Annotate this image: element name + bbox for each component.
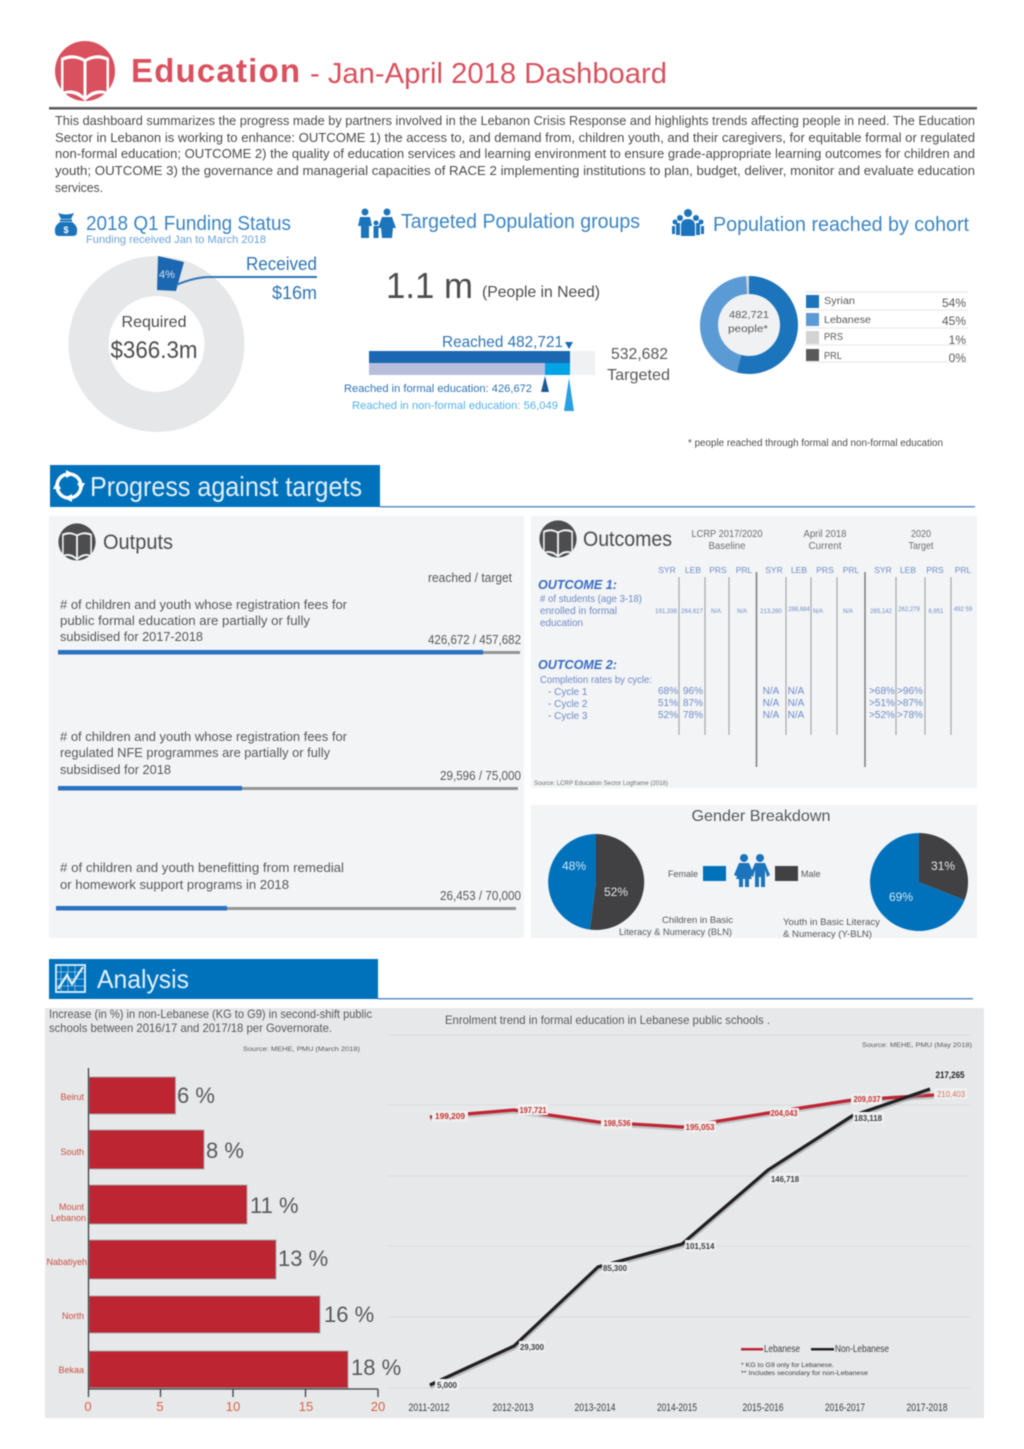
pie captions [619,915,880,940]
outcome 2: - Cycle 3 [548,711,588,722]
cohort sub-headers: PRS [926,565,944,575]
donut: funding: $366.3m [110,337,198,364]
outcome 2: >52% [869,710,895,721]
cohort sub-headers: PRL [736,565,753,575]
outcome 1: N/A [843,609,853,615]
x axis years: 2012-2013 [492,1402,534,1414]
cohort sub-headers: PRL [955,565,972,575]
pie: youth BLN [870,833,968,931]
icon: family [358,208,396,238]
title: - Jan-April 2018 Dashboard [310,58,667,90]
progress bar: reached vs targeted: Targeted [607,367,670,384]
series: Lebanese: 204,043 [770,1109,798,1118]
people in need: (People in Need) [482,284,600,301]
output 3 [56,860,521,910]
footnote: cohort: * people reached through formal and non-formal education [688,438,943,449]
donut: funding: Required [122,314,186,331]
outcome 1: 213,260 [760,609,782,615]
title: Education [131,52,300,89]
heading: funding: 2018 Q1 Funding Status [86,213,291,235]
series: Lebanese: 198,536 [604,1119,631,1128]
section header: progress against targets: Progress against targets [90,471,362,502]
x axis labels [84,1399,385,1414]
panel: analysis background [45,1008,984,1418]
x axis labels: 5 [156,1399,164,1414]
output 3: # of children and youth benefitting from remedial [60,860,344,875]
outcome 2: 52% [658,710,678,721]
series: Non-Lebanese: 217,265 [936,1070,964,1080]
heading: outputs: Outputs [103,531,173,554]
legend and notes: ** Includes secondary for non-Lebanese [741,1371,869,1377]
cohort sub-headers [658,565,972,575]
outcome 1: enrolled in formal [540,606,617,617]
legend and notes: * KG to G9 only for Lebanese. [741,1363,834,1369]
icon: couple [734,854,770,887]
donut: funding: Received [246,254,317,274]
x axis years: 2013-2014 [574,1402,616,1414]
y axis labels: South [60,1147,84,1157]
outcome 1: 265,142 [870,609,892,615]
cohort sub-headers: PRS [816,565,834,575]
outcome 2: N/A [788,710,805,721]
heading: gender: Gender Breakdown [692,808,830,825]
outcome 2: 78% [683,710,703,721]
pie: youth BLN: 31% [931,859,955,873]
pie: children BLN: 52% [604,885,628,899]
legend: cohort: PRL [824,351,842,362]
value labels: 18 % [351,1355,401,1380]
outcome 2: >87% [897,698,923,709]
icon: cycle arrows [53,470,85,502]
source: outcomes: Source: LCRP Education Sector Logframe (2018) [534,781,668,787]
x axis labels: 0 [84,1399,92,1414]
outcome 1: N/A [711,609,721,615]
column headers: 2020 [911,529,931,540]
outcome 2: >68% [869,686,895,697]
outcome 2: >78% [897,710,923,721]
bars [89,1077,348,1388]
outcome 1: education [540,618,583,629]
icon: red book [55,41,115,101]
intro paragraph: youth; OUTCOME 3) the governance and managerial capacities of RACE 2 implementing institutions to plan, budget, deliver, monitor and evaluate education [55,163,975,178]
x axis years: 2016-2017 [825,1402,865,1414]
legend: cohort: 1% [949,333,966,347]
output 2: # of children and youth whose registration fees for [60,729,348,744]
series: Lebanese: 210,403 [937,1090,966,1099]
bar chart: increase in non-Lebanese by Governorate [46,1007,401,1414]
series: Lebanese: 197,721 [520,1106,547,1115]
value labels: 13 % [278,1246,328,1271]
x axis years [408,1402,948,1414]
series: Non-Lebanese: 146,718 [771,1175,800,1184]
series: Non-Lebanese [430,1070,964,1390]
outcome 2: - Cycle 2 [548,699,588,710]
chart title: schools between 2016/17 and 2017/18 per Governorate. [49,1021,332,1035]
output 1: # of children and youth whose registration fees for [60,597,348,612]
cohort sub-headers: SYR [658,565,676,575]
series: Non-Lebanese: 101,514 [686,1242,715,1251]
people in need [386,265,600,306]
chart title [49,1007,372,1053]
output 3: 26,453 / 70,000 [440,888,521,903]
output 2 [58,729,521,790]
x axis years: 2011-2012 [408,1402,450,1414]
legend: gender [668,854,821,887]
outcome 2: 96% [683,686,703,697]
outcome 2: N/A [763,710,780,721]
intro paragraph: Sector in Lebanon is working to enhance: OUTCOME 1) the access to, and demand from, children youth, and their caregivers, for equitable formal or regulated [55,130,975,145]
y axis labels: Mount [59,1202,84,1212]
output 2: regulated NFE programmes are partially or fully [60,745,330,760]
panel: gender breakdown [531,805,977,940]
legend: gender: Male [801,869,821,879]
x axis years: 2014-2015 [657,1402,697,1414]
x axis labels: 15 [299,1399,313,1414]
column headers: Target [908,541,934,552]
line chart: enrolment trend [387,1013,972,1414]
panel: targeted population [344,208,670,412]
title [131,52,667,90]
y axis labels: Beirut [60,1092,84,1102]
outcome 2 [538,657,923,722]
icon: group of people [672,209,704,236]
series: Lebanese: 199,209 [435,1112,466,1121]
heading: targeted: Targeted Population groups [401,211,640,233]
y axis labels: Bekaa [58,1365,84,1375]
progress bar: reached vs targeted: Reached in formal education: 426,672 [344,383,532,395]
chart title: Increase (in %) in non-Lebanese (KG to G9) in second-shift public [49,1007,372,1021]
series: Non-Lebanese: 183,118 [854,1114,883,1123]
value labels: 8 % [206,1138,244,1163]
series: Lebanese: 209,037 [854,1095,881,1104]
outcome 1: 264,617 [681,609,704,615]
legend and notes [741,1344,889,1377]
outcome 2: >96% [897,686,923,697]
x axis labels: 10 [226,1399,240,1414]
legend and notes: Non-Lebanese [835,1344,889,1355]
legend: cohort: 0% [949,351,966,365]
y axis labels [46,1092,87,1375]
output 1: subsidised for 2017-2018 [60,629,203,644]
pie captions: Children in Basic [662,915,733,926]
outcome 2: Completion rates by cycle: [540,675,652,686]
cohort sub-headers: SYR [765,565,783,575]
value labels [177,1083,401,1380]
series: Non-Lebanese: 5,000 [437,1381,458,1390]
outcome 2: 68% [658,686,678,697]
donut: cohort [709,285,789,365]
heading: cohort: Population reached by cohort [713,214,969,236]
icon: money bag [55,213,77,236]
output 1: 426,672 / 457,682 [428,632,521,647]
axes [88,1068,378,1397]
pie captions: Youth in Basic Literacy [783,917,880,928]
donut: funding: 4% [159,269,175,281]
icon: money bag: $ [63,225,69,235]
progress bar: reached vs targeted: 532,682 [611,346,668,363]
progress bar: reached vs targeted: Reached 482,721 [442,334,563,351]
panel: funding status [55,213,317,412]
outcome 1: 492 59 [954,607,973,613]
series: Lebanese: 195,053 [686,1123,715,1132]
intro paragraph [55,113,975,195]
outcome 1: 6,951 [928,609,944,615]
x axis years: 2015-2016 [742,1402,784,1414]
icon: dark book [539,520,577,558]
series: Non-Lebanese: 29,300 [520,1343,545,1352]
pie captions: & Numeracy (Y-BLN) [783,929,872,940]
column headers: Current [808,541,842,552]
pie captions: Literacy & Numeracy (BLN) [619,927,732,938]
y axis labels: Lebanon [51,1213,86,1223]
panel: outputs [49,516,524,938]
icon: line chart [56,965,85,992]
outcome 1: 262,279 [898,607,920,613]
cohort sub-headers: LEB [900,565,916,575]
donut: funding [88,254,317,412]
outcome 2: 51% [658,698,678,709]
donut: cohort: 482,721 [729,310,769,321]
heading: outcomes: Outcomes [583,528,672,551]
legend: cohort: Lebanese [824,315,871,326]
outcome 1: OUTCOME 1: [538,577,617,592]
legend: gender: Female [668,869,698,879]
legend: cohort [805,292,968,365]
output 1 [58,597,521,654]
heading: funding: Funding received Jan to March 2018 [86,234,266,246]
output 1: public formal education are partially or fully [60,613,310,628]
series: Non-Lebanese: 85,300 [603,1264,628,1273]
outcome 1: 191,338 [655,609,678,615]
legend: cohort: 45% [942,314,966,328]
cohort sub-headers: LEB [791,565,807,575]
x axis years: 2017-2018 [906,1402,948,1414]
outcome 2: N/A [763,686,780,697]
donut: funding: $16m [272,283,317,303]
chart title [445,1013,972,1049]
outcome 2: N/A [788,686,805,697]
outcome 2: 87% [683,698,703,709]
y axis labels: Nabatiyeh [46,1257,87,1267]
outcome 2: >51% [869,698,895,709]
value labels: 11 % [250,1193,299,1218]
people in need: 1.1 m [386,265,473,306]
chart title: Enrolment trend in formal education in Lebanese public schools . [445,1013,770,1027]
output 2: 29,596 / 75,000 [440,768,521,783]
pie: children BLN [548,834,644,930]
legend: cohort: PRS [824,332,843,343]
intro paragraph: This dashboard summarizes the progress made by partners involved in the Lebanon Crisis Response and highlights trends affecting people in need. The Education [55,113,975,128]
x axis labels: 20 [371,1399,385,1414]
panel: outcomes [531,516,977,788]
cohort sub-headers: PRL [843,565,860,575]
progress bar: reached vs targeted: Reached in non-formal education: 56,049 [352,400,558,412]
outcome 2: - Cycle 1 [548,687,588,698]
column headers: LCRP 2017/2020 [692,529,763,540]
outcome 1: N/A [813,609,823,615]
section header: analysis [49,959,973,1000]
cohort sub-headers: PRS [709,565,727,575]
series: Lebanese [430,1088,967,1132]
legend and notes: Lebanese [764,1344,800,1355]
pie: children BLN: 48% [562,859,586,873]
legend: cohort: 54% [942,296,966,310]
chart title: Source: MEHE, PMU (March 2018) [243,1047,360,1053]
column headers [692,529,934,552]
panel: outputs: reached / target [428,570,512,585]
pie: youth BLN: 69% [889,890,913,904]
output 2: subsidised for 2018 [60,762,171,777]
outcome 2: OUTCOME 2: [538,657,617,672]
column headers: April 2018 [804,529,847,540]
column headers: Baseline [708,541,746,552]
outcome 1 [538,577,973,629]
cohort sub-headers: SYR [874,565,892,575]
chart title: Source: MEHE, PMU (May 2018) [862,1043,972,1049]
value labels: 6 % [177,1083,215,1108]
outcome 1: 288,684 [788,607,810,613]
icon: dark book [58,523,96,561]
cohort sub-headers: LEB [685,565,701,575]
progress bar: reached vs targeted [344,334,670,412]
section header: progress against targets [50,465,975,508]
donut: cohort: people* [728,324,768,335]
intro paragraph: services. [55,180,103,195]
outcome 1: # of students (age 3-18) [540,594,642,605]
intro paragraph: non-formal education; OUTCOME 2) the quality of education services and learning environment to ensure grade-appropriate learning outcomes for children and [55,146,975,161]
legend: cohort: Syrian [824,296,855,307]
outcome 2: N/A [763,698,780,709]
outcome 2: N/A [788,698,805,709]
output 3: or homework support programs in 2018 [60,877,289,892]
heading: funding [86,213,291,246]
value labels: 16 % [324,1302,374,1327]
y axis labels: North [62,1311,84,1321]
section header: analysis: Analysis [97,964,189,994]
panel: population by cohort [672,209,969,449]
outcome 1: N/A [737,609,747,615]
page header [55,41,667,101]
